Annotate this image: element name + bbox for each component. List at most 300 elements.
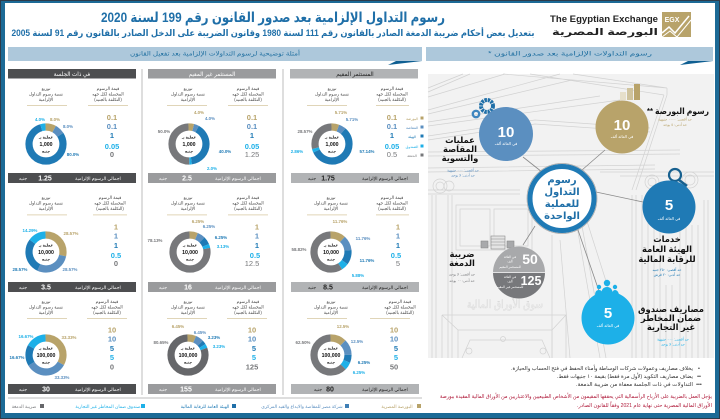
example 10,000 pounds: 11.76% [360, 258, 374, 263]
example 1,000 pounds: 1,000 [326, 142, 339, 148]
example 1,000 pounds: 1.25 [38, 176, 52, 182]
example 100,000 pounds: 10 [108, 326, 116, 334]
example 1,000 pounds: 0.1 [387, 113, 397, 122]
circle: fund fee: في العائة ألف [597, 323, 619, 328]
circle: clearing fee [479, 107, 533, 161]
example 1,000 pounds: 28.57% [298, 129, 313, 134]
example 1,000 pounds: 5.71% [346, 117, 358, 122]
circle: clearing fee: 10 [498, 124, 514, 141]
label: FRA services: حد أقصى: ٢٥٠ جنيه [652, 267, 682, 272]
label: risk guarantee fund: حد أقصى: ٠٠٠ جنيهية [657, 336, 689, 342]
column heading: المستثمر المقيم [336, 72, 374, 78]
example 100,000 pounds: 33.33% [62, 335, 77, 340]
logo: The Egyptian Exchange: البورصة المصرية [552, 27, 658, 38]
example 1,000 pounds: جنيه [308, 176, 316, 181]
example 1,000 pounds: 0.1 [387, 122, 397, 131]
example 1,000 pounds: 1,000 [183, 142, 196, 148]
example 1,000 pounds [8, 86, 136, 183]
example 100,000 pounds: 12.5% [351, 339, 363, 344]
example 100,000 pounds: المحصلة لكل جهه [91, 304, 123, 310]
label: clearing and settlement: حد أقصى: ٠٠٠ جنيهية [447, 168, 479, 172]
example 1,000 pounds: 0.05 [385, 142, 399, 151]
example 100,000 pounds: جنيه [19, 387, 27, 392]
example 100,000 pounds: توزيع [327, 299, 336, 304]
example 1,000 pounds: 57.14% [360, 149, 375, 154]
example 1,000 pounds: 0.1 [107, 113, 117, 122]
example 10,000 pounds: جنيه [308, 285, 316, 290]
example 10,000 pounds: نسبة رسوم التداول [29, 200, 63, 206]
legend: recipients footer: ضريبة الدمغة [12, 404, 36, 409]
example 1,000 pounds: نسبة رسوم التداول [171, 92, 205, 96]
example 100,000 pounds: 3.23% [213, 344, 225, 349]
example 100,000 pounds: المحصلة لكل جهه [384, 304, 416, 310]
panel: building illustration with fee circles [428, 74, 714, 358]
example 100,000 pounds: عملية بـ [38, 346, 54, 350]
example 100,000 pounds: 10 [248, 326, 256, 334]
example 100,000 pounds: 33.33% [55, 375, 70, 380]
example 100,000 pounds: 80.65% [154, 340, 169, 345]
example 10,000 pounds: المحصلة لكل جهه [232, 200, 264, 206]
icon: people [595, 280, 619, 296]
label: stamp tax [449, 249, 475, 283]
legend: fee recipients: البورصة [406, 117, 418, 121]
red note: capital gains tax deferral [440, 392, 712, 409]
label: risk guarantee fund: غير التجارية [647, 322, 695, 333]
example 1,000 pounds: نسبة رسوم التداول [315, 92, 349, 96]
example 10,000 pounds: توزيع [42, 195, 51, 200]
example 1,000 pounds: 1,000 [40, 142, 53, 148]
example 10,000 pounds: 6.25% [192, 219, 204, 224]
example 1,000 pounds: اجمالي الرسوم الإلزامية [215, 176, 261, 182]
example 100,000 pounds: توزيع [184, 299, 193, 304]
example 10,000 pounds: قيمة الرسوم [381, 195, 403, 200]
example 1,000 pounds: 0 [110, 150, 114, 159]
circle: fund fee [582, 292, 634, 344]
example 10,000 pounds: (التكلفة بالجنيه) [234, 206, 262, 211]
example 100,000 pounds: جنيه [159, 387, 167, 392]
example 10,000 pounds: 28.57% [64, 231, 79, 236]
circle: financial regulatory authority fee [642, 180, 696, 234]
legend: fee recipients: الدمغة [407, 154, 417, 158]
example 100,000 pounds: قيمة الرسوم [96, 299, 118, 304]
example 10,000 pounds: نسبة رسوم التداول [171, 200, 205, 206]
icon: coins [481, 236, 514, 249]
example 10,000 pounds: 10,000 [38, 250, 54, 256]
example 100,000 pounds: 5 [110, 344, 114, 353]
example 1,000 pounds: 0.5 [387, 150, 397, 159]
example 100,000 pounds: الإلزامية [324, 310, 338, 316]
label: risk guarantee fund: مصاريف صندوق [638, 304, 704, 315]
example 1,000 pounds: 50.0% [158, 129, 170, 134]
example 10,000 pounds: جنيه [159, 285, 167, 290]
example 1,000 pounds: 8.0% [50, 117, 60, 122]
label: stamp tax: حد أدنى: ٠٠ يوجد [449, 278, 475, 283]
example 10,000 pounds: 8.5 [323, 284, 333, 292]
label: bourse fees: رسوم البورصة ** [647, 106, 709, 117]
example 100,000 pounds: 62.50% [296, 340, 311, 345]
footnotes: يخلاف مصاريف وعمولات شركات الوساطة وأمناء الحفظ في فتح الحساب والحيازة. [511, 364, 693, 372]
example 10,000 pounds: 0.5 [391, 251, 401, 260]
example 1,000 pounds: اجمالي الرسوم الإلزامية [362, 176, 408, 182]
example 1,000 pounds: المحصلة لكل جهه [92, 92, 124, 96]
example 10,000 pounds: 78.13% [148, 238, 163, 243]
example 100,000 pounds: 6.45% [194, 330, 206, 335]
label: FRA services: للرقابة المالية [638, 254, 696, 265]
example 10,000 pounds: 11.76% [356, 236, 370, 241]
circle: stamp tax: في العائة [504, 255, 516, 259]
example 100,000 pounds: 6.25% [358, 360, 370, 365]
example 10,000 pounds: 6.25% [203, 224, 215, 229]
example 1,000 pounds [148, 86, 276, 183]
example 10,000 pounds: 16 [184, 284, 192, 292]
example 100,000 pounds: 10 [108, 334, 116, 344]
circle: fund fee: 5 [604, 305, 612, 322]
column heading [8, 69, 136, 78]
example 1,000 pounds: 1.75 [321, 176, 335, 182]
example 10,000 pounds: 0 [114, 259, 118, 268]
center circle: trading fees per transaction: الواحدة [544, 211, 580, 222]
circle: stamp tax: للمستثمر المقيم [499, 265, 521, 269]
example 100,000 pounds: اجمالي الرسوم الإلزامية [362, 387, 408, 393]
example 10,000 pounds: 3.13% [217, 244, 229, 249]
legend: recipients footer: صندوق ضمان المخاطر غير التجارية [75, 404, 141, 409]
example 10,000 pounds: توزيع [327, 195, 336, 200]
example 100,000 pounds: نسبة رسوم التداول [29, 304, 63, 310]
circle: stamp tax: 50 [522, 251, 538, 267]
footnotes: التداولات في ذات الجلسة معفاة من ضريبة الدمغة. [576, 382, 693, 388]
example 100,000 pounds: 0 [110, 362, 114, 372]
example 10,000 pounds: 1 [396, 241, 400, 250]
example 1,000 pounds: 40.0% [219, 149, 231, 154]
circle: stamp tax: في العائة [504, 275, 516, 279]
label: FRA services: الهيئة العامة [642, 244, 692, 255]
legend: recipients footer: شركة مصر للمقاصة والايداع والقيد المركزي [261, 404, 343, 409]
circle: financial regulatory authority fee: 5 [665, 197, 673, 214]
example 1,000 pounds: 1 [390, 131, 394, 140]
example 100,000 pounds: المحصلة لكل جهه [232, 304, 264, 310]
example 10,000 pounds: نسبة رسوم التداول [314, 200, 348, 206]
example 1,000 pounds: 1 [110, 131, 114, 140]
example 1,000 pounds: المحصلة لكل جهه [376, 92, 408, 96]
circle: stamp tax: للمستثمر غير المقيم [497, 285, 523, 289]
example 1,000 pounds: اجمالي الرسوم الإلزامية [75, 176, 121, 182]
example 100,000 pounds: 12.5% [337, 324, 349, 329]
example 1,000 pounds: الإلزامية [39, 97, 53, 103]
example 10,000 pounds [8, 195, 136, 292]
footnotes: •• [697, 374, 701, 380]
example 1,000 pounds: جنيه [42, 150, 50, 154]
example 10,000 pounds [148, 195, 276, 292]
example 1,000 pounds: 1.25 [245, 150, 259, 159]
label: FRA services [638, 234, 696, 277]
example 10,000 pounds: 1 [255, 241, 259, 250]
example 100,000 pounds: جنيه [184, 360, 192, 364]
column heading [290, 69, 418, 78]
connector lines [523, 150, 643, 294]
example 10,000 pounds: 5 [396, 259, 400, 268]
example 100,000 pounds: 50 [390, 362, 398, 372]
example 1,000 pounds: جنيه [159, 176, 167, 181]
example 100,000 pounds: 5 [394, 344, 398, 353]
legend: fee recipients: الهيئة [408, 135, 416, 139]
example 10,000 pounds: اجمالي الرسوم الإلزامية [362, 285, 408, 291]
icon: gears [473, 100, 493, 117]
icon: magnifier [669, 169, 687, 186]
example 100,000 pounds: (التكلفة بالجنيه) [234, 310, 262, 315]
example 10,000 pounds: 28.57% [63, 267, 78, 272]
example 100,000 pounds: 6.25% [353, 370, 365, 375]
label: FRA services: خدمات [653, 234, 681, 244]
example 100,000 pounds: نسبة رسوم التداول [171, 304, 205, 310]
label: risk guarantee fund [638, 304, 704, 346]
example 1,000 pounds: عملية بـ [181, 136, 197, 140]
example 10,000 pounds: جنيه [327, 258, 335, 262]
example 1,000 pounds: 2.86% [291, 149, 303, 154]
example 10,000 pounds: 10,000 [323, 250, 339, 256]
example 100,000 pounds: 5 [252, 344, 256, 353]
red note: capital gains tax deferral: الأوراق المالية المصرية حتى نهاية عام 2021 وفقاً للقانون الصادر. [577, 401, 712, 409]
logo: The Egyptian Exchange: EGX [665, 17, 680, 24]
circle: financial regulatory authority fee: في العائة ألف [658, 216, 680, 221]
example 100,000 pounds: 5 [252, 353, 256, 362]
circle: bourse fee [596, 100, 648, 154]
example 100,000 pounds: جنيه [327, 360, 335, 364]
center circle: trading fees per transaction: رسوم [547, 175, 577, 186]
example 100,000 pounds: 80 [326, 386, 334, 394]
example 1,000 pounds: المحصلة لكل جهه [232, 92, 264, 96]
label: clearing and settlement [442, 135, 479, 178]
example 1,000 pounds: قيمة الرسوم [97, 86, 119, 91]
background building drawing [428, 74, 714, 358]
legend: recipients footer: الهيئة العامة للرقابة المالية [181, 404, 229, 409]
example 100,000 pounds [8, 299, 136, 394]
example 10,000 pounds: 10,000 [182, 250, 198, 256]
example 100,000 pounds: 16.67% [19, 334, 34, 339]
logo: The Egyptian Exchange: The Egyptian Exchange [550, 14, 658, 24]
column heading: المستثمر غير المقيم [189, 72, 236, 78]
example 100,000 pounds: (التكلفة بالجنيه) [386, 310, 414, 315]
example 10,000 pounds: جنيه [19, 285, 27, 290]
example 1,000 pounds: 2.5 [182, 176, 192, 182]
label: stamp tax: حد أقصى: لا يوجد [449, 272, 475, 276]
example 100,000 pounds: نسبة رسوم التداول [314, 304, 348, 310]
example 10,000 pounds: توزيع [184, 195, 193, 200]
example 10,000 pounds: 28.57% [13, 267, 28, 272]
example 1,000 pounds: (التكلفة بالجنيه) [378, 97, 406, 102]
example 1,000 pounds: 4.0% [194, 110, 204, 115]
example 1,000 pounds: قيمة الرسوم [381, 86, 403, 91]
example 100,000 pounds: 30 [42, 386, 50, 394]
example 100,000 pounds: قيمة الرسوم [389, 299, 411, 304]
example 100,000 pounds: اجمالي الرسوم الإلزامية [215, 387, 261, 393]
column heading [148, 69, 276, 78]
example 100,000 pounds: (التكلفة بالجنيه) [93, 310, 121, 315]
circle: clearing fee: في العائة ألف [495, 141, 517, 146]
example 10,000 pounds: الإلزامية [324, 206, 338, 212]
example 10,000 pounds: 0.5 [250, 251, 260, 260]
panel: non-resident investor column [148, 69, 276, 394]
example 1,000 pounds: 80.0% [67, 152, 79, 157]
banner: mandatory fees [426, 47, 713, 65]
label: clearing and settlement: والتسوية [442, 153, 478, 164]
example 1,000 pounds: 0.1 [247, 113, 257, 122]
example 1,000 pounds: جنيه [19, 176, 27, 181]
example 10,000 pounds: جنيه [186, 258, 194, 262]
circle: stamp tax: ألف [507, 278, 513, 284]
example 1,000 pounds: توزيع [328, 86, 337, 91]
panel: resident investor column [290, 69, 424, 394]
example 1,000 pounds: 0.1 [247, 122, 257, 131]
example 10,000 pounds: جنيه [42, 258, 50, 262]
footnotes [511, 364, 702, 388]
example 1,000 pounds: 2.0% [207, 166, 217, 171]
example 10,000 pounds: 1 [114, 232, 118, 240]
example 10,000 pounds: اجمالي الرسوم الإلزامية [215, 285, 261, 291]
example 100,000 pounds: 100,000 [179, 353, 197, 359]
circle: stamp tax: ألف [507, 258, 513, 264]
example 10,000 pounds: (التكلفة بالجنيه) [96, 206, 124, 211]
example 1,000 pounds: قيمة الرسوم [237, 86, 259, 91]
label: bourse fees: حد أدنى: لا يوجد [663, 122, 687, 127]
example 100,000 pounds: قيمة الرسوم [237, 299, 259, 304]
example 100,000 pounds: 5 [110, 353, 114, 362]
example 10,000 pounds: 11.76% [333, 219, 347, 224]
label: clearing and settlement: المقاصة [443, 144, 477, 154]
example 1,000 pounds [291, 86, 424, 183]
label: clearing and settlement: حد أدنى: لا يوجد [451, 172, 475, 178]
example 1,000 pounds: عملية بـ [324, 136, 340, 140]
example 1,000 pounds: توزيع [184, 86, 193, 91]
label: FRA services: حد أدنى: ٢٠ قرش [654, 272, 680, 277]
column heading: في ذات الجلسة [54, 72, 91, 78]
example 1,000 pounds: الإلزامية [325, 97, 339, 103]
example 100,000 pounds: عملية بـ [323, 346, 339, 350]
circle: bourse fee: في العائة ألف [611, 134, 633, 139]
example 100,000 pounds: جنيه [314, 387, 322, 392]
example 1,000 pounds: 0.1 [107, 122, 117, 131]
center circle: trading fees per transaction [527, 164, 597, 234]
footnotes: يضاف مصاريف التكويد (لأول مرة فقط) بقيمة ١٠ جنيهات فقط. [557, 372, 693, 380]
example 100,000 pounds: 100,000 [322, 353, 340, 359]
legend: recipients footer: البورصة المصرية [381, 404, 413, 409]
example 10,000 pounds: 14.29% [23, 228, 38, 233]
example 10,000 pounds: 12.5 [245, 259, 259, 268]
label: risk guarantee fund: حد أدنى: لا يوجد [661, 342, 685, 346]
example 100,000 pounds: اجمالي الرسوم الإلزامية [75, 387, 121, 393]
example 10,000 pounds: 3.5 [41, 284, 51, 292]
banner: examples: أمثلة توضيحية لرسوم التداولات الإلزامية بعد تفعيل القانون [130, 50, 300, 58]
example 10,000 pounds: (التكلفة بالجنيه) [378, 206, 406, 211]
example 10,000 pounds: عملية بـ [38, 244, 54, 248]
example 1,000 pounds: 0.05 [245, 142, 259, 151]
example 100,000 pounds: الإلزامية [181, 310, 195, 316]
label: stamp tax: الدمغة [449, 258, 475, 268]
example 1,000 pounds: (التكلفة بالجنيه) [234, 97, 262, 102]
example 100,000 pounds: 100,000 [37, 353, 55, 359]
example 1,000 pounds: 8.0% [63, 124, 73, 129]
example 100,000 pounds: 10 [390, 334, 398, 344]
example 100,000 pounds: جنيه [42, 360, 50, 364]
example 10,000 pounds: 0.5 [111, 251, 121, 260]
background building drawing: سوق الأوراق المالية [467, 297, 543, 311]
example 10,000 pounds: عملية بـ [182, 244, 198, 248]
example 100,000 pounds: 125 [246, 362, 258, 372]
circle: stamp tax: 125 [521, 274, 541, 288]
example 10,000 pounds: الإلزامية [181, 206, 195, 212]
example 1,000 pounds: جنيه [328, 150, 336, 154]
example 100,000 pounds [148, 299, 276, 394]
example 100,000 pounds: 6.45% [172, 324, 184, 329]
example 10,000 pounds: 1 [255, 232, 259, 240]
example 100,000 pounds: توزيع [42, 299, 51, 304]
example 10,000 pounds: 5.88% [352, 273, 364, 278]
example 1,000 pounds: 4.0% [35, 117, 45, 122]
example 10,000 pounds: 1 [255, 222, 259, 232]
example 10,000 pounds: المحصلة لكل جهه [94, 200, 126, 206]
example 100,000 pounds: 155 [180, 386, 192, 394]
legend: fee recipients: الصندوق [406, 145, 418, 149]
label: bourse fees: حد أقصى: ٠٠٠٠ جنيهية [658, 116, 692, 122]
example 10,000 pounds: 1 [396, 232, 400, 240]
label: bourse fees [647, 106, 709, 127]
example 10,000 pounds: المحصلة لكل جهه [376, 200, 408, 206]
banner: examples [8, 47, 422, 65]
example 10,000 pounds: 1 [114, 241, 118, 250]
example 100,000 pounds: 10 [390, 326, 398, 334]
example 100,000 pounds: 5 [394, 353, 398, 362]
label: risk guarantee fund: ضمان المخاطر [640, 313, 701, 324]
example 100,000 pounds: 10 [248, 334, 256, 344]
example 1,000 pounds: 0.05 [105, 142, 119, 151]
circle: stamp tax [493, 246, 545, 298]
center circle: trading fees per transaction: التداول [544, 187, 580, 198]
legend: fee recipients [406, 116, 424, 158]
panel: same-session column [8, 69, 136, 394]
example 100,000 pounds: 16.67% [10, 355, 25, 360]
subtitle: بتعديل بعض أحكام ضريبة الدمغة الصادر بالقانون رقم 111 لسنة 1980 وقانون الضريبة على الدخل الصادر بالقانون رقم 91 لسنة 2005 [11, 27, 534, 39]
example 10,000 pounds: اجمالي الرسوم الإلزامية [75, 285, 121, 291]
logo: The Egyptian Exchange [550, 12, 691, 38]
example 10,000 pounds: عملية بـ [323, 244, 339, 248]
example 1,000 pounds: 4.0% [205, 116, 215, 121]
example 100,000 pounds [291, 299, 419, 394]
example 100,000 pounds: الإلزامية [39, 310, 53, 316]
legend: recipients footer [12, 404, 421, 409]
example 100,000 pounds: 3.23% [208, 335, 220, 340]
example 10,000 pounds: 58.82% [292, 247, 307, 252]
footnotes: ••• [696, 382, 702, 388]
example 10,000 pounds: الإلزامية [39, 206, 53, 212]
example 1,000 pounds: عملية بـ [38, 136, 54, 140]
banner: mandatory fees: رسوم التداولات الإلزامية بعد صدور القانون * [488, 50, 652, 58]
example 10,000 pounds: قيمة الرسوم [237, 195, 259, 200]
example 1,000 pounds: نسبة رسوم التداول [29, 92, 63, 96]
circle: bourse fee: 10 [614, 117, 630, 134]
example 1,000 pounds: 5.71% [335, 110, 347, 115]
example 10,000 pounds [291, 195, 419, 292]
label: clearing and settlement: عمليات [445, 135, 475, 145]
example 1,000 pounds: 1 [250, 131, 254, 140]
title: رسوم التداول الإلزامية بعد صدور القانون رقم 199 لسنة 2020 [101, 9, 445, 26]
example 100,000 pounds: عملية بـ [180, 346, 196, 350]
label: stamp tax: ضريبة [450, 249, 474, 260]
legend: fee recipients: المقاصة [406, 126, 418, 130]
example 1,000 pounds: (التكلفة بالجنيه) [94, 97, 122, 102]
example 10,000 pounds: 6.25% [215, 235, 227, 240]
example 1,000 pounds: الإلزامية [181, 97, 195, 103]
icon: bar chart [620, 84, 640, 100]
example 1,000 pounds: توزيع [42, 86, 51, 91]
